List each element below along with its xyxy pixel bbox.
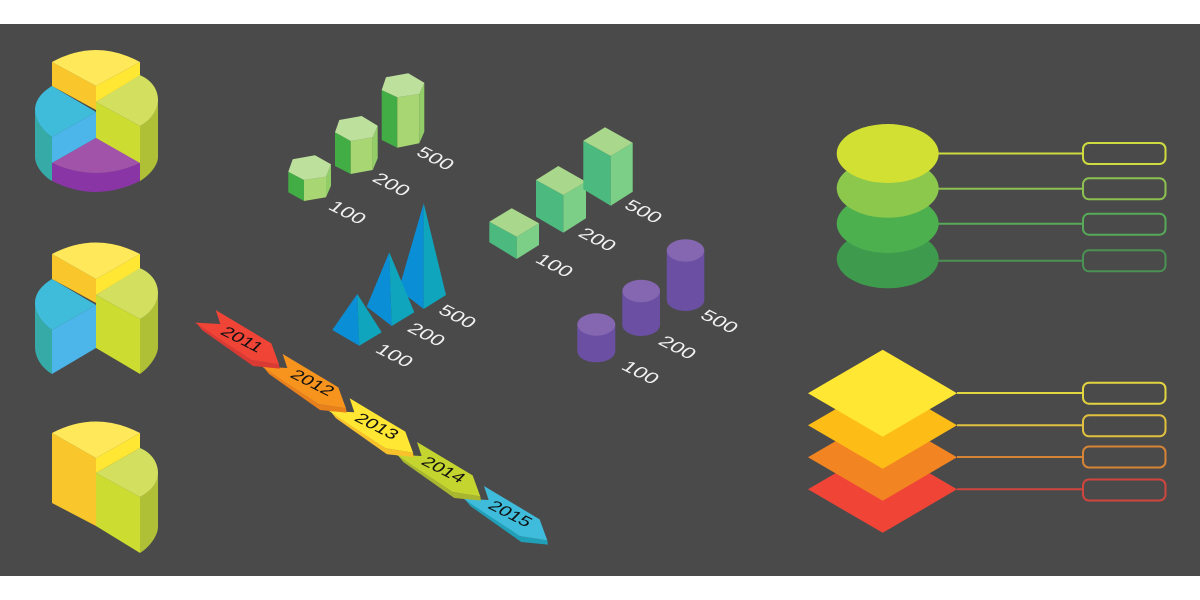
cylinder 100 [577,313,663,388]
ribbon segment 2011: 2011 [217,323,268,355]
hex bar 100 [288,155,370,228]
connector lines and empty label boxes [938,143,1166,271]
cube bar 500: 500 [620,197,666,227]
ribbon segment 2011 [195,310,280,369]
diamond layers [808,350,957,533]
hex bar 500: 500 [412,144,458,174]
pyramid 500: 500 [434,302,480,332]
hex bar 500 [382,73,458,174]
cylinder 200 [622,280,700,363]
ribbon segment 2015: 2015 [484,497,536,530]
pyramid 100 [332,294,417,371]
cube bar 200 [536,166,620,255]
cylinder 500 [667,239,742,337]
pyramid 200: 200 [403,320,449,350]
ribbon segment 2013 [329,398,414,457]
pyramid 200 [367,252,449,350]
pyramid 100: 100 [371,341,417,371]
cube bar 100: 100 [531,251,577,281]
ribbon segment 2012: 2012 [286,366,339,399]
bar chart: hexagonal prisms [288,73,458,228]
bar chart: pyramids [332,203,480,371]
ribbon segment 2014: 2014 [417,453,470,486]
cube bar 200: 200 [574,225,620,255]
bar chart: cubes [489,127,666,281]
ribbon segment 2013: 2013 [351,410,403,443]
pie chart: full five segments [35,50,158,192]
bar chart: cylinders [577,239,742,388]
ribbon segment 2015 [463,486,548,545]
hex bar 200: 200 [368,170,414,200]
cube bar 100 [489,208,577,281]
pie chart: two segments [52,422,158,553]
connector lines and empty label boxes [957,383,1166,500]
ribbon segment 2012 [262,354,347,413]
cylinder 200: 200 [654,333,700,363]
ribbon segment 2014 [396,442,481,501]
pie chart: three segments [35,242,158,374]
cylinder 100: 100 [617,358,663,388]
pyramid 500 [399,203,480,332]
timeline ribbon 2011 to 2015 [195,310,548,545]
stacked ellipses diagram with label boxes [837,124,1166,288]
ellipse layers [837,124,939,288]
hex bar 100: 100 [324,198,370,228]
hex bar 200 [335,116,414,200]
cube bar 500 [583,127,666,227]
stacked diamonds diagram with label boxes [808,350,1166,533]
cylinder 500: 500 [696,307,742,337]
